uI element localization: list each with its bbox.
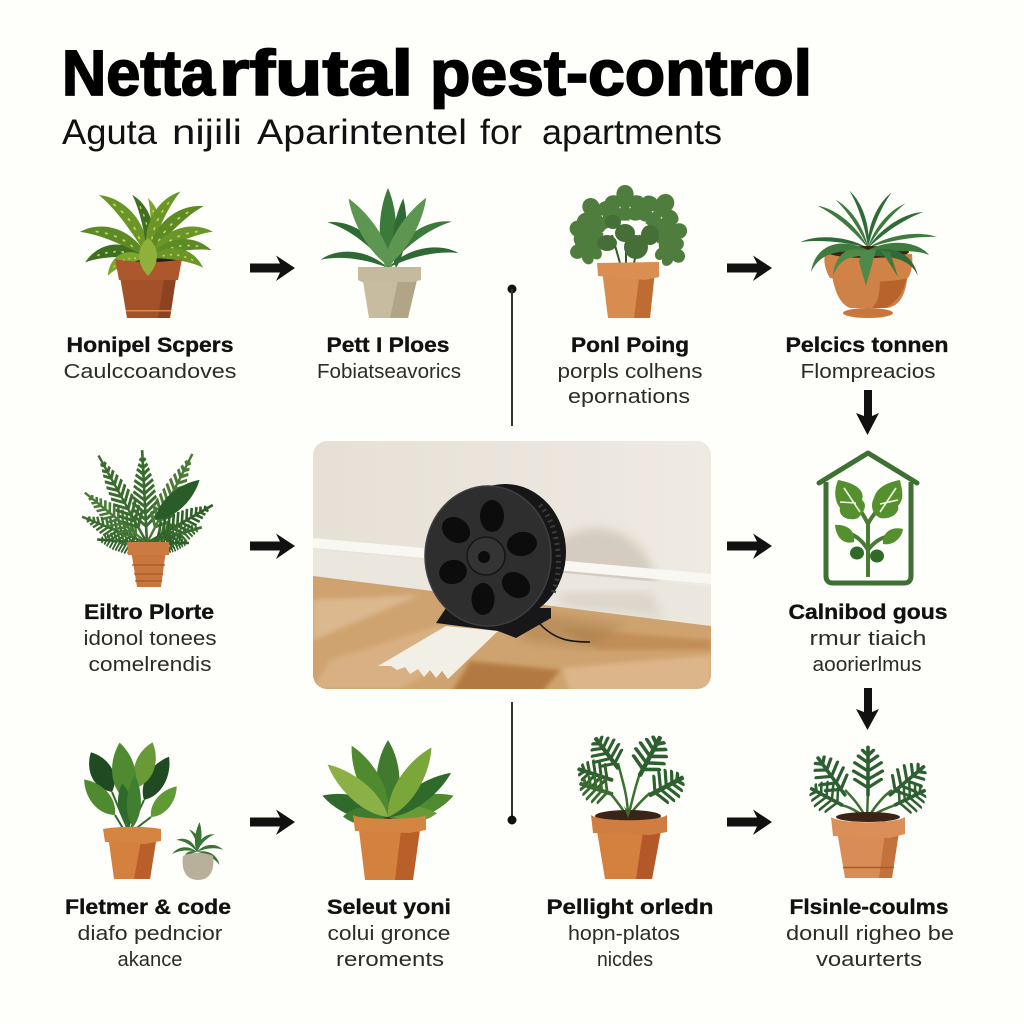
label: plant 7: diafo pedncior xyxy=(78,923,223,945)
plant 7: broad leaves with small companion plant xyxy=(77,739,223,880)
arrow xyxy=(727,256,772,281)
plant 3: bushy lobed plant in terracotta pot xyxy=(564,183,693,318)
down arrow, upper xyxy=(856,390,879,435)
plant 4: spider plant in bowl pot xyxy=(800,189,937,318)
arrow xyxy=(727,810,772,835)
divider with dot, upper xyxy=(508,284,516,426)
subtitle: Aguta xyxy=(62,113,158,152)
label: plant 3: Ponl Poing xyxy=(571,334,689,357)
divider with dot, lower xyxy=(508,702,516,824)
reel hub xyxy=(467,537,505,575)
reel shadow on wall xyxy=(563,525,658,582)
reel base xyxy=(436,608,551,638)
plant 2: spiky plant in beige pot xyxy=(321,188,458,318)
label: plant 10: donull righeo be xyxy=(786,923,954,945)
wire xyxy=(540,624,590,642)
title: Netta xyxy=(62,37,215,109)
label: plant 7: Fletmer & code xyxy=(65,896,231,919)
label: plant 5: Eiltro Plorte xyxy=(84,601,214,624)
label: plant 9: nicdes xyxy=(597,949,653,971)
reel windows xyxy=(436,500,539,615)
floor boards xyxy=(313,595,711,695)
subtitle xyxy=(62,113,722,152)
reel rear xyxy=(492,484,566,608)
label: plant 10: Flsinle-coulms xyxy=(790,896,948,919)
reel ribs xyxy=(540,505,558,595)
label: plant 4: Pelcics tonnen xyxy=(786,334,948,357)
label: plant 5 xyxy=(84,601,216,676)
title: rfutal xyxy=(219,37,413,109)
label: plant 7: akance xyxy=(118,949,182,971)
label: greenhouse: aoorierlmus xyxy=(812,654,922,676)
label: plant 2: Pett I Ploes xyxy=(326,334,450,357)
arrow xyxy=(250,534,295,559)
label: plant 3 xyxy=(558,334,702,408)
label: plant 5: comelrendis xyxy=(88,654,212,676)
hub centre xyxy=(478,551,490,563)
plant 10: fern-like plant in terracotta pot xyxy=(804,747,933,878)
label: greenhouse: Calnibod gous xyxy=(788,601,948,624)
reel front xyxy=(425,486,551,626)
skirting top edge xyxy=(313,538,711,584)
label: plant 8: reroments xyxy=(336,949,444,971)
label: plant 1: Caulccoandoves xyxy=(64,361,236,383)
subtitle: for xyxy=(480,113,522,152)
label: plant 1: Honipel Scpers xyxy=(66,334,234,357)
arrow xyxy=(250,810,295,835)
label: plant 8 xyxy=(327,896,451,971)
label: greenhouse: rmur tiaich xyxy=(810,628,926,650)
label: plant 10 xyxy=(786,896,954,971)
label: plant 8: Seleut yoni xyxy=(327,896,451,919)
skirting board xyxy=(544,573,711,626)
subtitle: apartments xyxy=(542,113,722,152)
label: plant 3: epornations xyxy=(568,386,690,408)
arrow xyxy=(727,534,772,559)
title: pest-control xyxy=(430,37,812,109)
greenhouse icon xyxy=(819,453,917,583)
subtitle: Aparintentel xyxy=(257,113,467,152)
infographic canvas xyxy=(62,48,953,966)
label: greenhouse xyxy=(788,601,948,676)
label: plant 10: voaurterts xyxy=(816,949,922,971)
plant 8: broad green leaves in terracotta pot xyxy=(319,740,457,880)
floor shadow xyxy=(522,614,618,648)
label: plant 2: Fobiatseavorics xyxy=(317,361,461,383)
arrow xyxy=(250,256,295,281)
label: plant 8: colui gronce xyxy=(328,923,450,945)
label: plant 4 xyxy=(786,334,948,383)
wall xyxy=(313,441,711,588)
label: plant 4: Flompreacios xyxy=(800,361,936,383)
label: plant 9: hopn-platos xyxy=(568,923,680,945)
plant 5: fern in terracotta pot xyxy=(78,449,219,587)
label: plant 3: porpls colhens xyxy=(558,361,702,383)
floor xyxy=(313,576,711,689)
title xyxy=(62,37,812,109)
centre photo: reel device at skirting board xyxy=(313,441,711,695)
label: plant 2 xyxy=(317,334,461,383)
plant 1: variegated plant in dark terracotta pot xyxy=(80,185,213,318)
label: plant 9 xyxy=(546,896,714,971)
label: plant 1 xyxy=(64,334,236,383)
reel shadow on skirting xyxy=(560,592,665,618)
down arrow, lower xyxy=(856,688,879,730)
paper strip xyxy=(378,626,498,679)
plant 9: compound-leaf plant in terracotta pot xyxy=(575,730,690,879)
label: plant 5: idonol tonees xyxy=(84,628,216,650)
label: plant 7 xyxy=(65,896,231,971)
subtitle: nijili xyxy=(172,113,242,152)
label: plant 9: Pellight orledn xyxy=(546,896,714,919)
